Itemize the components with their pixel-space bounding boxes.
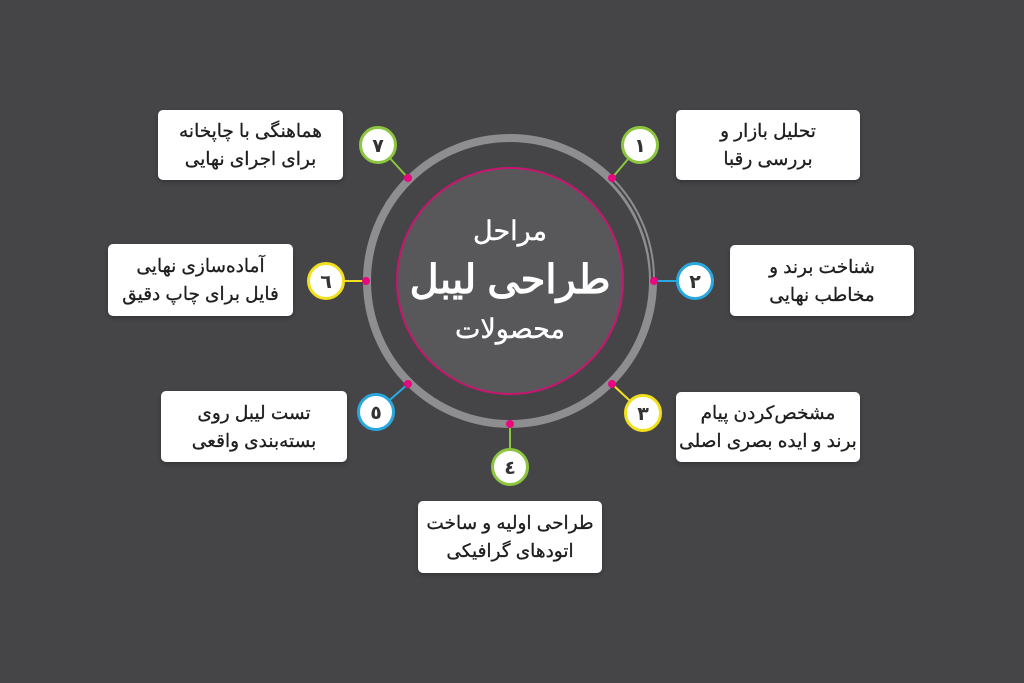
- box 1: تحلیل بازار و: [720, 120, 816, 141]
- badge 4: [492, 450, 528, 484]
- badge 2: ٢: [689, 272, 701, 293]
- box 4: طراحی اولیه و ساخت: [426, 512, 594, 533]
- box 6: [108, 244, 293, 316]
- box 1: [676, 110, 860, 180]
- box 2: [730, 245, 914, 316]
- badge 3: [626, 396, 660, 430]
- connectors and badges: [308, 128, 712, 484]
- box 5: تست لیبل روی: [197, 402, 311, 422]
- box 2: مخاطب نهایی: [769, 284, 875, 304]
- badge 2: [678, 264, 712, 298]
- box 3: مشخص‌کردن پیام: [701, 402, 835, 423]
- badge 7: [360, 128, 396, 162]
- box 5: بسته‌بندی واقعی: [192, 430, 316, 450]
- badge 1: ١: [634, 136, 646, 157]
- center circle: طراحی لیبل: [410, 258, 610, 304]
- box 1: بررسی رقبا: [723, 148, 813, 169]
- box 4: [418, 501, 602, 573]
- box 6: آماده‌سازی نهایی: [136, 255, 265, 276]
- badge 4: ٤: [504, 458, 516, 479]
- center circle: مراحل: [473, 216, 547, 247]
- badge 5: ٥: [370, 403, 382, 424]
- box 7: برای اجرای نهایی: [185, 148, 316, 169]
- box 7: [158, 110, 343, 180]
- box 3: برند و ایده بصری اصلی: [679, 430, 857, 451]
- box 5: [161, 391, 347, 462]
- badge 6: [308, 264, 344, 298]
- center circle: محصولات: [455, 314, 565, 345]
- outer ring: [367, 138, 654, 424]
- center circle: [397, 168, 623, 394]
- badge 5: [358, 394, 394, 430]
- badge 3: ٣: [637, 404, 649, 425]
- badge 6: ٦: [320, 272, 332, 293]
- box 6: فایل برای چاپ دقیق: [122, 283, 279, 304]
- box 2: شناخت برند و: [769, 256, 875, 276]
- badge 1: [622, 128, 658, 162]
- box 3: [676, 392, 860, 462]
- box 4: اتودهای گرافیکی: [446, 540, 574, 561]
- box 7: هماهنگی با چاپخانه: [179, 120, 322, 141]
- badge 7: ٧: [372, 136, 384, 157]
